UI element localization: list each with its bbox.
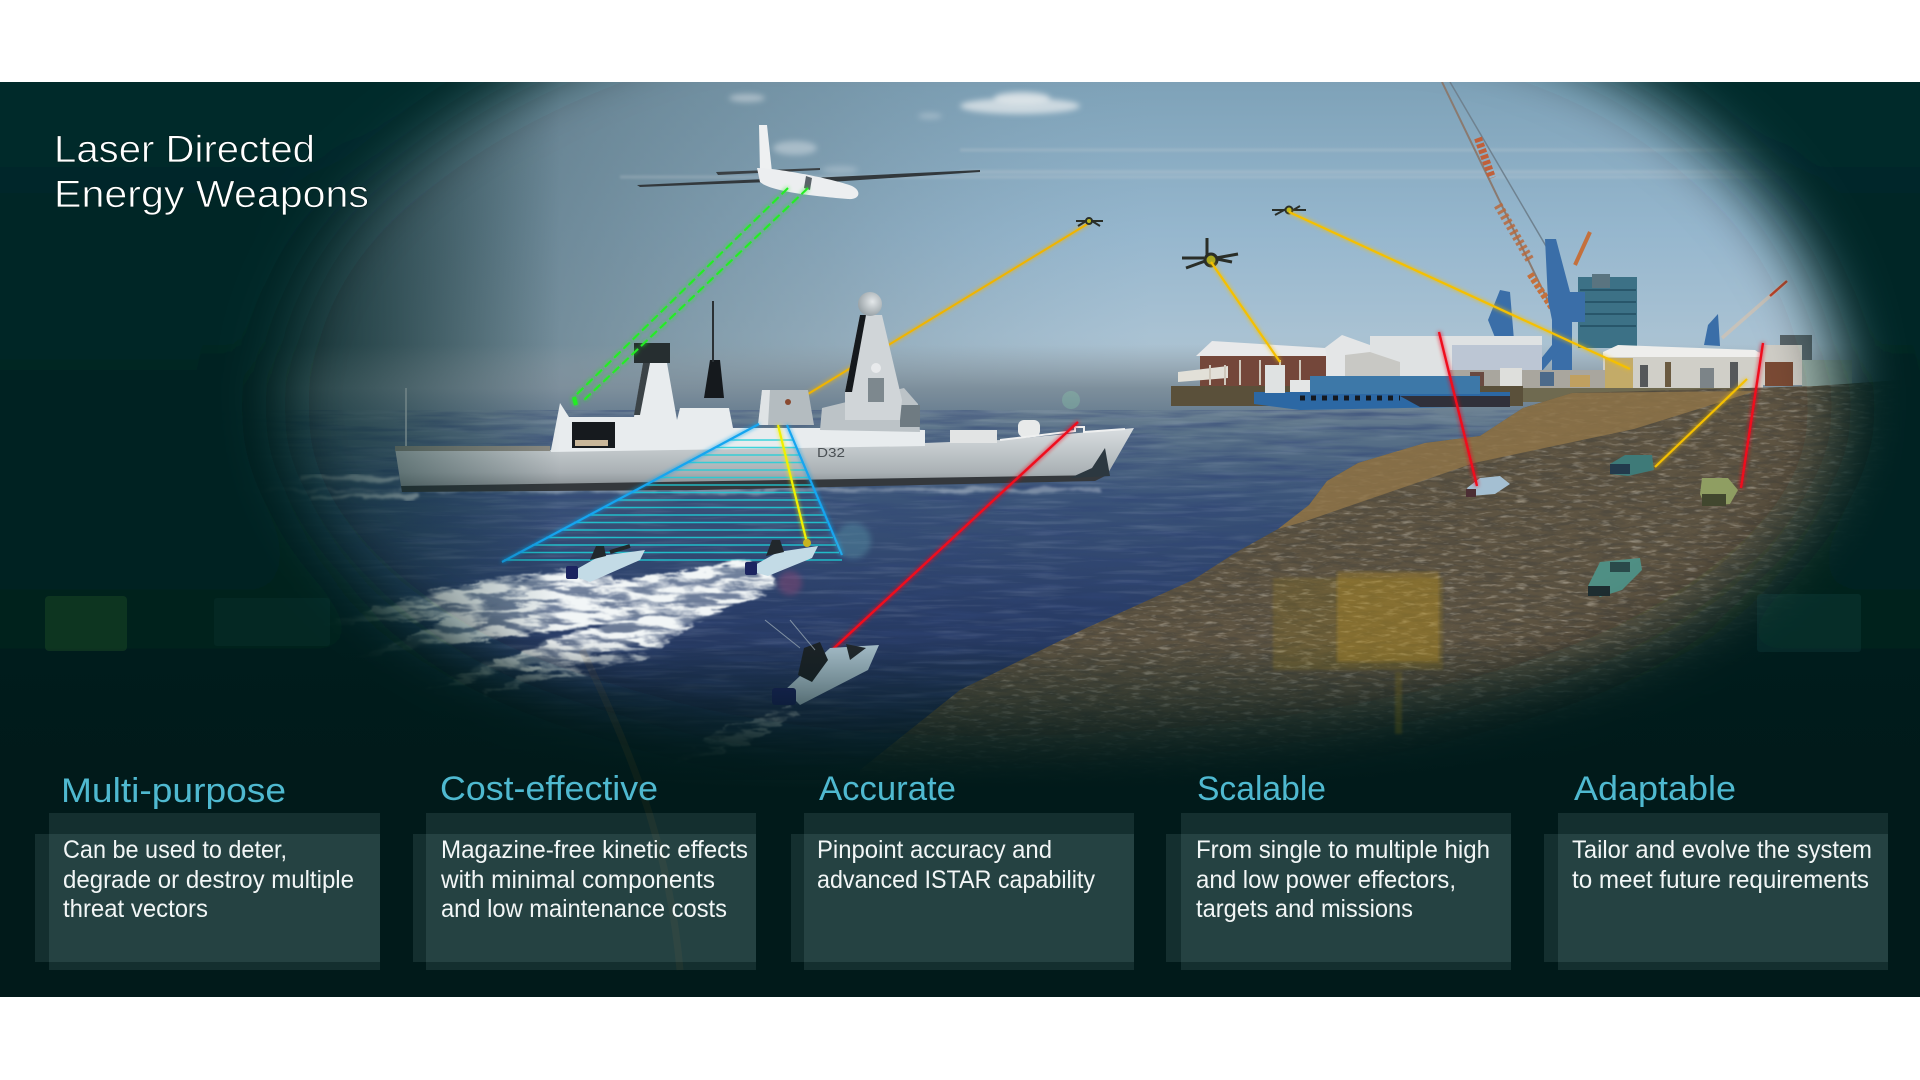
truck 2 [1610, 455, 1654, 476]
sea [260, 353, 1863, 772]
left dimming [0, 82, 560, 782]
panel: Cost-effective [413, 770, 756, 970]
laser: yellow ship to drone, behind mast [808, 223, 1089, 394]
heading: Accurate: Accurate [819, 770, 956, 808]
white deckhouse [551, 363, 925, 452]
lens flares on scene [778, 391, 1080, 595]
flare: gold squares [1273, 572, 1443, 734]
heading: Multi-purpose: Multi-purpose [61, 772, 286, 810]
laser: green dashed targeting beam [574, 188, 808, 405]
panel: Multi-purpose [35, 772, 380, 970]
laser: cyan scan lines [504, 440, 842, 560]
distant dark buildings [1780, 335, 1812, 360]
bow wave [1070, 448, 1110, 478]
high-rise block [1578, 274, 1637, 348]
crane: lattice boom [1442, 82, 1590, 312]
quay [1171, 386, 1523, 406]
body: Multi-purpose: threat vectors [63, 895, 208, 923]
flare: faint squares [45, 594, 1861, 652]
land: hillside [880, 382, 1879, 763]
laser: blue scan fan [502, 424, 842, 562]
hangar block [758, 390, 814, 425]
red brick warehouse [1178, 341, 1327, 387]
body: Cost-effective [440, 836, 748, 923]
heading: Adaptable: Adaptable [1574, 770, 1736, 808]
boat wakes [320, 558, 800, 765]
body: Accurate: Pinpoint accuracy and [817, 836, 1052, 864]
bow fittings [950, 430, 997, 443]
lasers: yellow beams [1211, 212, 1747, 467]
drone 2 [1182, 238, 1238, 268]
title [54, 129, 369, 216]
hull [395, 428, 1134, 486]
pennant number: D32 [817, 445, 845, 460]
harbour [1171, 82, 1852, 410]
UAV [637, 125, 980, 199]
laser: yellow beam to boat [778, 425, 807, 543]
wake: foam streaks [320, 558, 800, 765]
body: Accurate [817, 836, 1095, 894]
bottom fade [0, 640, 1920, 997]
body: Scalable: From single to multiple high [1196, 836, 1490, 864]
heading: Scalable: Scalable [1197, 770, 1326, 808]
body: Scalable [1196, 836, 1490, 923]
body: Multi-purpose [63, 836, 354, 923]
boat 3 [765, 620, 879, 705]
body: Cost-effective: Magazine-free kinetic effects [441, 836, 748, 864]
body: Multi-purpose: degrade or destroy multiple [63, 866, 354, 894]
panel: Scalable [1166, 770, 1511, 970]
flare: orange arc [582, 650, 680, 970]
radar box [634, 343, 670, 363]
radar sphere [858, 292, 882, 316]
wake: soft base [330, 562, 775, 685]
drone 3 [1272, 206, 1306, 215]
clouds [729, 92, 1080, 174]
body: Scalable: targets and missions [1196, 895, 1413, 923]
right sheds [1603, 345, 1852, 390]
drones [1076, 206, 1306, 268]
panel: Adaptable [1544, 770, 1888, 970]
boat 1 [566, 546, 645, 582]
ship [395, 292, 1134, 492]
blue tugs [1254, 365, 1510, 410]
crane: blue towers [1488, 239, 1720, 370]
panel: Accurate [791, 770, 1134, 970]
body: Adaptable [1572, 836, 1872, 894]
ship wake [240, 478, 1100, 497]
main tower [845, 315, 902, 420]
sky [262, 82, 1872, 386]
aft deck [395, 446, 550, 451]
title: Energy Weapons [54, 174, 369, 216]
boat 2 [745, 539, 818, 576]
body: Cost-effective: and low maintenance costs [441, 895, 727, 923]
body: Scalable: and low power effectors, [1196, 866, 1456, 894]
brown upper path [1278, 391, 1756, 529]
body: Multi-purpose: Can be used to deter, [63, 836, 287, 864]
body: Accurate: advanced ISTAR capability [817, 866, 1095, 894]
white factory [1324, 335, 1542, 376]
lasers: red beams [833, 332, 1763, 649]
heading: Cost-effective: Cost-effective [440, 770, 658, 808]
trucks on hillside [1466, 455, 1738, 597]
body: Adaptable: Tailor and evolve the system [1572, 836, 1872, 864]
body: Cost-effective: with minimal components [440, 866, 715, 894]
title: Laser Directed [54, 129, 315, 171]
dock clutter [1450, 368, 1605, 388]
truck 3 [1700, 478, 1738, 506]
antenna [405, 388, 407, 447]
body: Adaptable: to meet future requirements [1572, 866, 1869, 894]
truck 1 [1466, 476, 1510, 497]
forward block [820, 388, 920, 432]
black mast [704, 360, 724, 398]
far crane boom [1722, 281, 1787, 338]
drone 1 [1076, 218, 1103, 226]
truck 4 [1588, 558, 1642, 597]
lens streaks [620, 150, 1800, 177]
